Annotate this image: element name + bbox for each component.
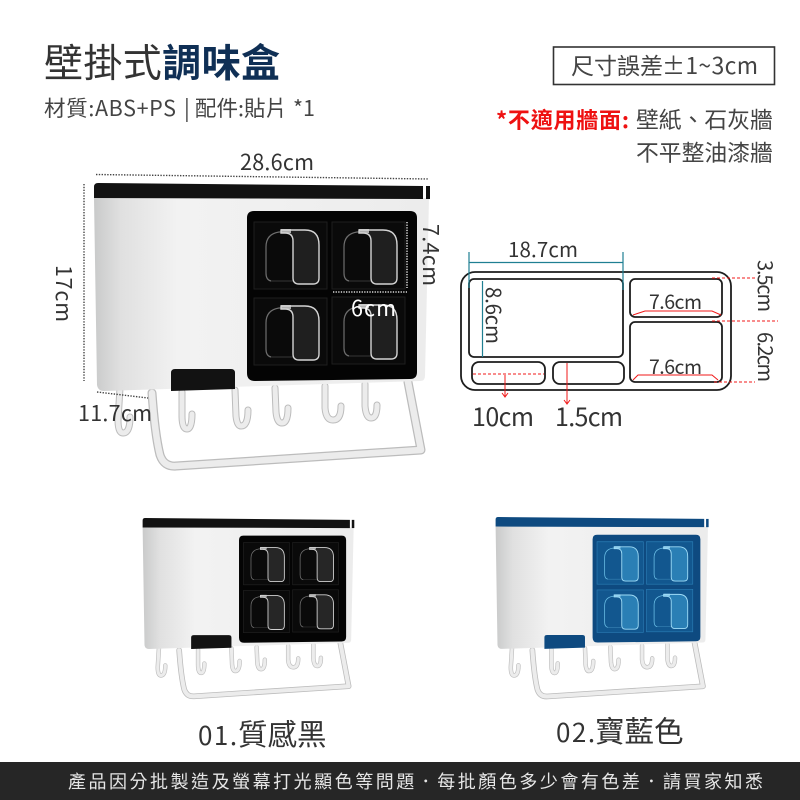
height guides: [712, 278, 778, 382]
title: 壁掛式調味盒: [44, 33, 280, 89]
black variant label: 質感黑: [238, 712, 327, 754]
product dimensions: 11.7cm: [78, 397, 152, 428]
small middle compartment: [553, 362, 624, 384]
upper compartment measure: [633, 311, 721, 315]
tolerance note box: 尺寸誤差: [571, 47, 663, 81]
product dimensions: [49, 146, 447, 428]
unsuitable walls warning: *不適用牆面:: [496, 103, 629, 135]
footer notice bar: 產品因分批製造及螢幕打光顯色等問題．每批顏色多少會有色差．請買家知悉: [68, 768, 763, 794]
storage layout diagram: 6.2cm: [752, 332, 781, 382]
upper compartment label: 7.6cm: [649, 286, 702, 315]
unsuitable walls warning: [496, 102, 773, 168]
teal width measure: [469, 252, 623, 290]
product dimensions: 17cm: [49, 265, 80, 322]
storage layout diagram: [461, 233, 781, 434]
product dimensions: 7.4cm: [416, 224, 447, 286]
blue variant label: 寶藍色: [595, 709, 684, 751]
black variant label: 01.: [198, 716, 239, 753]
height labels: 3.5cm: [752, 260, 781, 312]
1.5cm guide arrow: [564, 363, 570, 404]
specifications text: *1: [293, 92, 315, 123]
tolerance note box: [554, 47, 774, 84]
blue variant product: [496, 517, 709, 696]
product dimensions: 6cm: [351, 292, 396, 323]
storage layout diagram: 1.5cm: [555, 398, 623, 434]
black variant product: [143, 518, 354, 696]
small left compartment: [472, 362, 545, 384]
width label: 18.7cm: [508, 233, 578, 263]
specifications text: 材質:ABS+PS: [44, 92, 176, 123]
lower right compartment: [630, 322, 722, 382]
depth label: 8.6cm: [480, 287, 510, 344]
10cm guide arrow: [473, 373, 544, 375]
tolerance note box: ±1~3cm: [662, 47, 758, 81]
blue variant label: 02.: [556, 713, 597, 750]
tray outline: [461, 272, 731, 390]
product dimensions: 28.6cm: [240, 146, 314, 177]
unsuitable walls warning: 壁紙、石灰牆: [636, 102, 773, 135]
large product illustration: [94, 183, 430, 466]
upper right compartment: [630, 279, 722, 317]
footer notice bar: [0, 762, 800, 800]
specifications text: 配件:貼片: [195, 92, 287, 123]
teal depth measure: [482, 281, 484, 357]
bottom size labels: 10cm: [472, 398, 534, 434]
large compartment: [469, 279, 623, 357]
lower compartment measure: [633, 375, 718, 380]
lower compartment label: 7.6cm: [649, 351, 702, 380]
unsuitable walls warning: 不平整油漆牆: [636, 135, 773, 168]
specifications text: |: [184, 92, 190, 123]
